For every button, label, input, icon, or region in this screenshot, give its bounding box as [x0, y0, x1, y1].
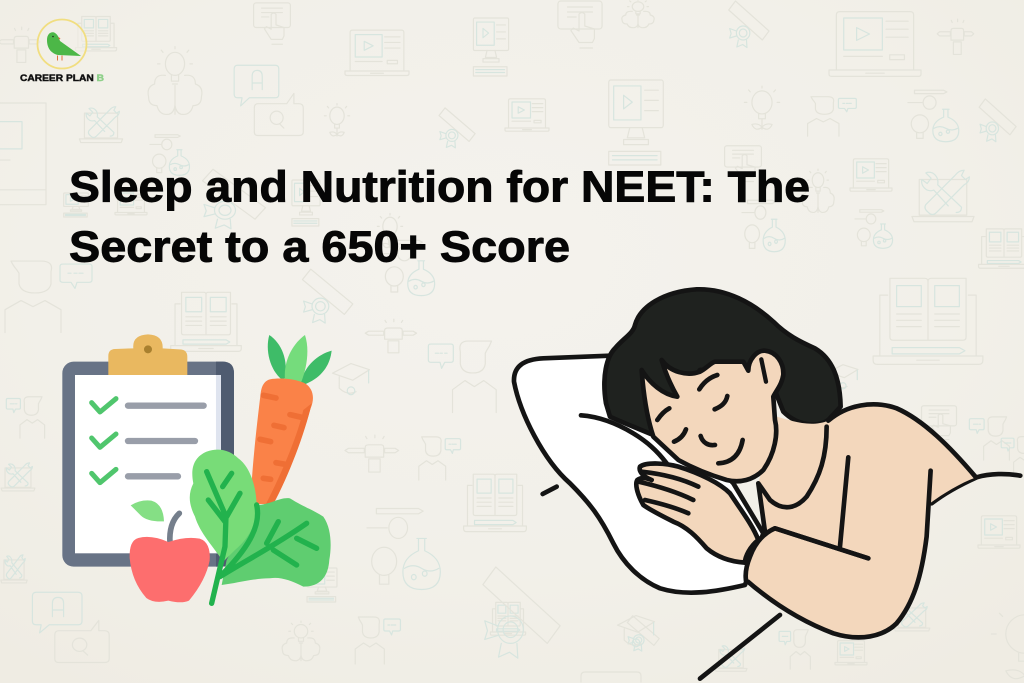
hair — [604, 289, 841, 435]
pillow fold — [581, 415, 667, 463]
sleeve — [746, 528, 868, 580]
carrot — [251, 335, 332, 504]
apple stem — [170, 513, 179, 543]
body — [746, 404, 976, 637]
blanket lines — [543, 474, 1020, 679]
logo wordmark: CAREER PLAN B — [20, 73, 104, 84]
closed eyes and brows — [657, 375, 743, 463]
title: Secret to a 650+ Score — [69, 224, 570, 272]
face — [642, 351, 783, 481]
ear mark — [761, 359, 766, 382]
leaf veins — [207, 472, 317, 603]
title — [69, 164, 810, 272]
logo ring — [38, 20, 86, 68]
clipboard — [62, 334, 234, 567]
left leaf — [190, 450, 257, 562]
title: Sleep and Nutrition for NEET: The — [69, 164, 810, 212]
pillow — [514, 356, 763, 593]
illustration: sleeping person — [514, 289, 1020, 679]
logo: Career Plan B — [20, 20, 104, 84]
right leaf — [222, 498, 331, 587]
fingers — [638, 472, 698, 513]
illustration: clipboard and healthy food — [62, 334, 332, 603]
apple — [130, 537, 210, 602]
apple leaf — [131, 500, 164, 521]
body outlines — [746, 404, 976, 637]
leafy greens — [190, 450, 331, 603]
bird — [47, 32, 81, 60]
hand — [636, 463, 758, 563]
checklist — [92, 399, 204, 483]
clipboard clip — [108, 334, 187, 375]
